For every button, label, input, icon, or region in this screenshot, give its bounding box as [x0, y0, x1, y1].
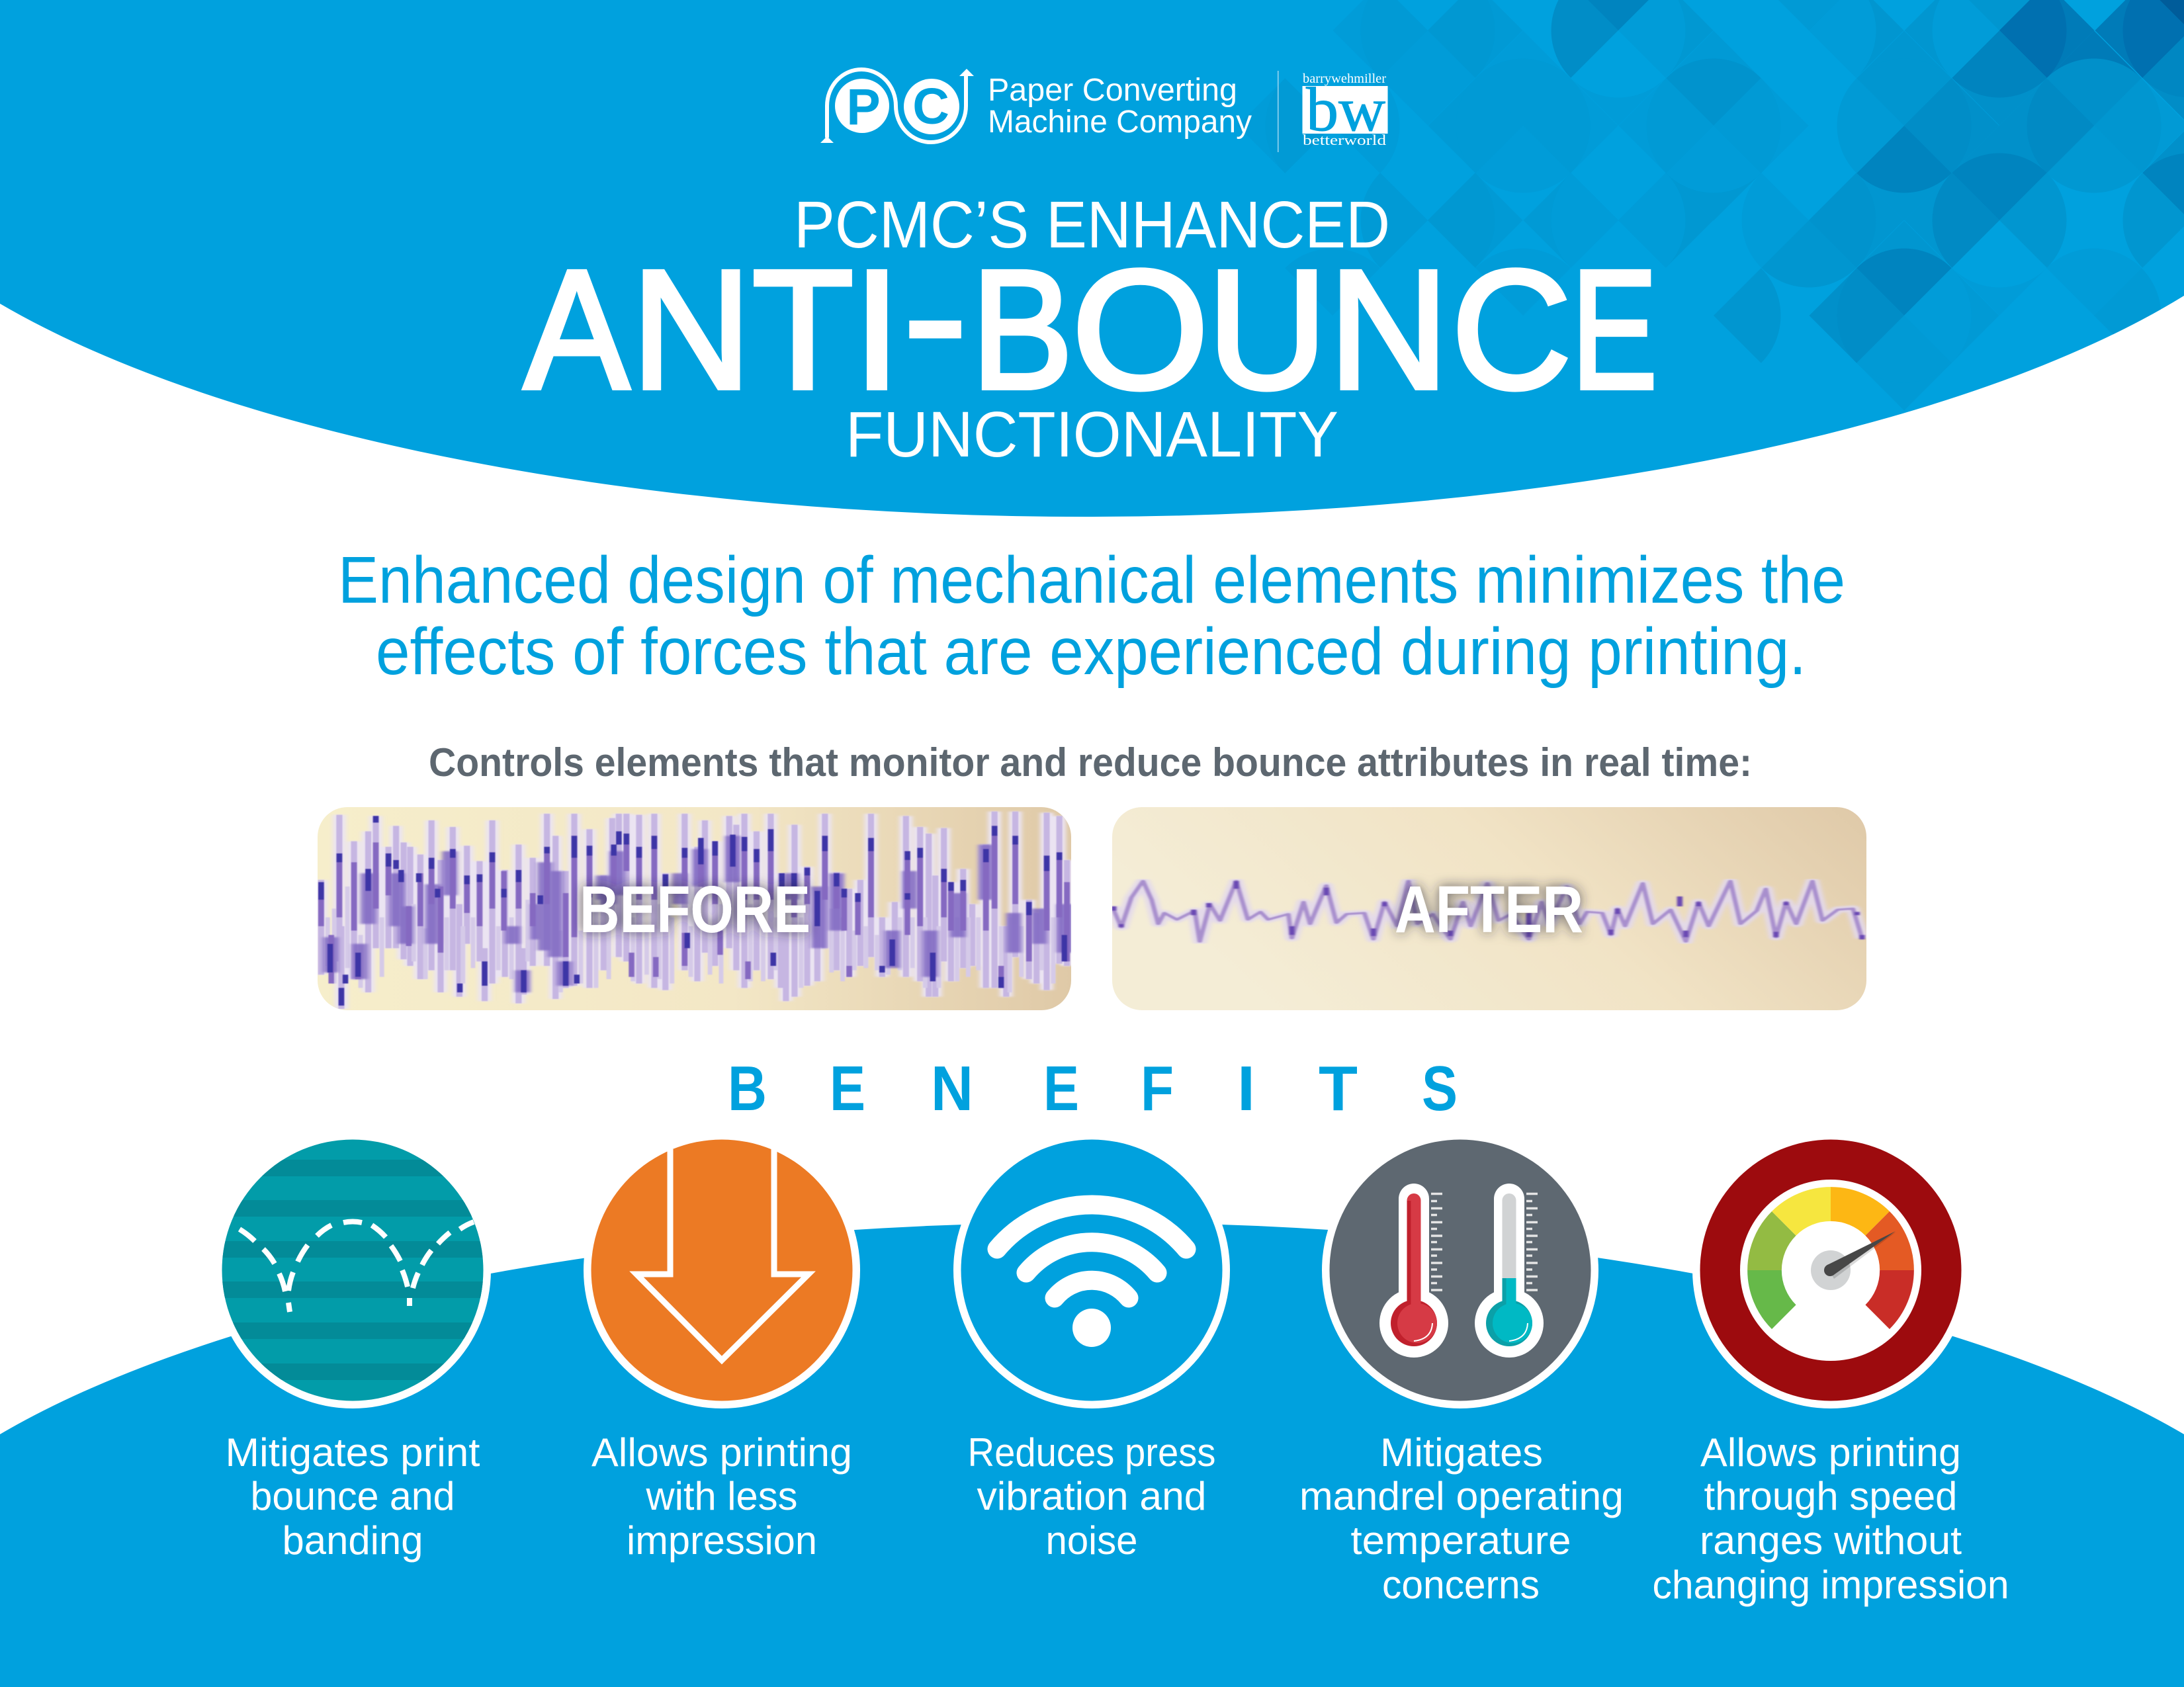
- benefits heading: E: [830, 1053, 865, 1124]
- title: O: [1072, 236, 1209, 425]
- benefit caption: temperature: temperature: [1351, 1518, 1571, 1563]
- logo wordmark: [988, 73, 1252, 140]
- logo: barrywehmiller bw betterworld: barrywehmiller: [1303, 71, 1386, 86]
- logo: Paper Converting Machine Company: [820, 69, 1388, 152]
- title: B: [971, 236, 1073, 425]
- benefit caption: vibration: Reduces press: [967, 1430, 1216, 1475]
- benefit caption: temperature: mandrel operating: [1299, 1474, 1624, 1518]
- title: A: [524, 236, 629, 425]
- benefits heading: N: [931, 1053, 973, 1124]
- benefits heading: F: [1141, 1053, 1174, 1124]
- benefit caption: impression: impression: [627, 1518, 817, 1563]
- logo: barrywehmiller bw betterworld: betterworld: [1303, 132, 1386, 148]
- title: U: [1207, 236, 1327, 425]
- teal thermometer: [1475, 1184, 1544, 1358]
- benefit caption: vibration: vibration and: [977, 1474, 1207, 1518]
- controls sentence: Controls elements that monitor and reduce bounce attributes in real time:: [429, 740, 1752, 785]
- title: E: [1571, 236, 1657, 425]
- benefits heading: S: [1422, 1053, 1458, 1124]
- header blue panel: [0, 0, 2184, 517]
- benefit caption: vibration: noise: [1045, 1518, 1138, 1563]
- icon: thermometers circle: [1322, 1132, 1598, 1408]
- title: C: [1452, 236, 1571, 425]
- logo: barrywehmiller bw betterworld: bw: [1306, 75, 1385, 144]
- benefit caption: vibration: [967, 1430, 1216, 1563]
- benefits heading: T: [1319, 1053, 1358, 1124]
- logo wordmark: Machine Company: [988, 105, 1252, 140]
- benefits heading: E: [1043, 1053, 1079, 1124]
- benefit caption: speed: ranges without: [1700, 1518, 1962, 1563]
- benefit caption: speed: changing impression: [1653, 1563, 2009, 1607]
- title: FUNCTIONALITY: [846, 398, 1338, 470]
- title: -: [903, 222, 967, 411]
- benefit caption: impression: Allows printing: [591, 1430, 852, 1475]
- benefit caption: bounce: [225, 1430, 480, 1563]
- benefit caption: speed: [1653, 1430, 2009, 1607]
- icon: wifi vibration circle: [953, 1132, 1230, 1408]
- benefit caption: bounce: banding: [282, 1518, 423, 1563]
- benefit caption: bounce: Mitigates print: [225, 1430, 480, 1475]
- icon: PC roller mark: P: [846, 79, 881, 136]
- title: N: [1329, 236, 1449, 425]
- benefits heading: I: [1237, 1053, 1255, 1124]
- title: N: [631, 236, 752, 425]
- icon: down arrow circle: [584, 1132, 860, 1408]
- icon: PC roller mark: C: [912, 78, 949, 135]
- title: I: [853, 236, 900, 425]
- title: PCMC’S ENHANCED: [794, 188, 1390, 262]
- icon: bounce circle: [214, 1132, 491, 1408]
- panel: before chart trace: [318, 807, 1071, 1010]
- benefit caption: speed: Allows printing: [1700, 1430, 1961, 1475]
- AFTER label: AFTER: [1395, 873, 1583, 947]
- icon: speed gauge circle: [1692, 1132, 1969, 1408]
- red thermometer: [1379, 1184, 1448, 1358]
- benefit caption: temperature: [1299, 1430, 1624, 1607]
- benefit caption: temperature: Mitigates: [1380, 1430, 1543, 1475]
- logo wordmark: Paper Converting: [988, 73, 1237, 108]
- subtitle text: effects of forces that are experienced during printing.: [376, 615, 1806, 689]
- panel: after chart trace: [1112, 807, 1866, 1010]
- subtitle text: [338, 543, 1845, 689]
- benefit caption: impression: with less: [646, 1474, 798, 1518]
- benefits heading: B: [728, 1053, 767, 1124]
- BEFORE label: BEFORE: [580, 873, 810, 947]
- panel: bottom blue band: [0, 1223, 2184, 1687]
- benefit caption: bounce: bounce and: [250, 1474, 455, 1518]
- title: [524, 188, 1657, 470]
- subtitle text: Enhanced design of mechanical elements minimizes the: [338, 543, 1845, 617]
- icon: PC roller mark: [820, 69, 974, 143]
- benefit caption: impression: [591, 1430, 852, 1563]
- title: T: [752, 236, 853, 425]
- benefit caption: temperature: concerns: [1382, 1563, 1540, 1607]
- benefit caption: speed: through speed: [1704, 1474, 1957, 1518]
